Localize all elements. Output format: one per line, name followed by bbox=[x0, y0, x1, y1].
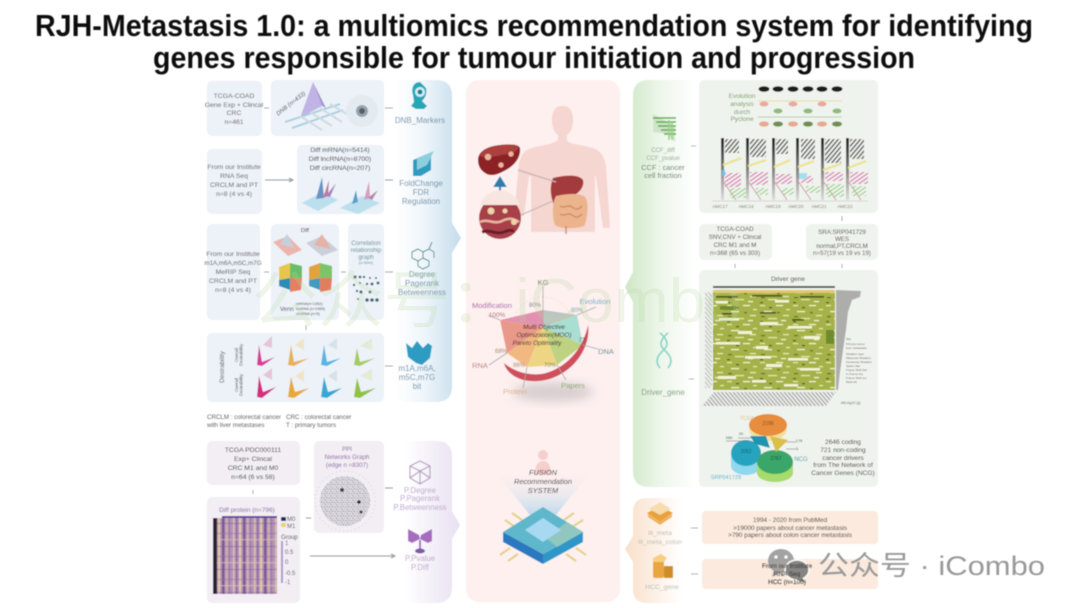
text: PPI network: Networks Graph bbox=[325, 454, 370, 461]
text: NCG note: cancer drivers bbox=[822, 455, 864, 462]
arrow bbox=[252, 490, 254, 494]
legend: oncoplot: In Frame Ins bbox=[846, 372, 863, 376]
watermark: center faint: 公众号：iCombo bbox=[252, 267, 742, 336]
text: TCGA-COAD SNV: n=368 (65 vs 303) bbox=[710, 250, 760, 257]
text: differential RNA counts: Diff mRNA(n=5414) bbox=[310, 147, 370, 154]
text: HCC gene: HCC_gene bbox=[645, 584, 679, 591]
icon: HCC gene bbox=[653, 554, 673, 578]
text: P metrics: P.Pagerank bbox=[400, 494, 440, 503]
text: fusion system bbox=[514, 468, 572, 495]
icon: literature box bbox=[647, 502, 673, 525]
legend: oncoplot: Mutation type bbox=[846, 352, 864, 356]
text: modification sites bbox=[398, 364, 436, 391]
arrow bbox=[264, 271, 393, 273]
text: correlation graph: Correlation bbox=[351, 241, 381, 247]
text: desirability axis labels: Desirability bbox=[238, 373, 244, 396]
card: evolution analysis bbox=[699, 80, 878, 213]
text: Venn labels: 280 bbox=[726, 435, 733, 440]
title bbox=[35, 8, 1033, 75]
arrow bbox=[264, 107, 393, 109]
text: AMC labels: AMC19 bbox=[738, 204, 754, 209]
text: NCG note: Cancer Genes (NCG) bbox=[811, 470, 875, 477]
text: abbreviation legend bbox=[206, 414, 351, 429]
text: abbreviation legend: CRCLM : colorectal cancer bbox=[207, 414, 281, 421]
card: diff protein heatmap bbox=[207, 497, 300, 603]
text: P metrics bbox=[393, 486, 447, 512]
chart: radar rings bbox=[513, 297, 573, 357]
legend: oncoplot: -Mb-log10 (q) bbox=[840, 401, 860, 405]
text: PPI network: PPI bbox=[342, 446, 352, 453]
text: literature: lit_meta bbox=[648, 530, 672, 537]
text: abbreviation legend: T : primary tumors bbox=[286, 422, 336, 429]
text: fold change: Regulation bbox=[402, 197, 440, 206]
text: correlation graph bbox=[351, 241, 382, 265]
text: AMC labels: AMC17 bbox=[712, 204, 728, 209]
text: TCGA PDC source: n=64 (6 vs 58) bbox=[231, 474, 275, 481]
legend: oncoplot: Frame Shift Del bbox=[846, 368, 867, 372]
chart: DNB surface: DNB (n=433) bbox=[276, 91, 307, 117]
text: PubMed: >19000 papers about cancer metastasis bbox=[733, 525, 847, 532]
chart: DNB radial bbox=[346, 95, 378, 127]
card: DNB plot bbox=[271, 80, 384, 136]
text: SRA: SRA:SRP041729 bbox=[818, 229, 866, 236]
arrow bbox=[691, 145, 696, 147]
text: MOO caption: Pareto Optimality bbox=[512, 340, 562, 347]
text: DNB markers: DNB_Markers bbox=[395, 116, 445, 125]
text: radar labels: 80% bbox=[529, 303, 542, 309]
text: Venn labels: 2767 bbox=[770, 456, 782, 462]
icon: purple tree bbox=[408, 529, 432, 554]
legend: oncoplot: Nonsense Mutation bbox=[846, 360, 872, 364]
card: RNA seq source bbox=[207, 149, 262, 214]
panel: fusion recommendation system bbox=[498, 450, 588, 564]
text: desirability axis labels: Overall bbox=[234, 378, 239, 392]
chart: RNA volcano left bbox=[302, 177, 338, 211]
panel: literature and HCC bbox=[638, 502, 878, 591]
text: RNA seq source: CRCLM and PT bbox=[210, 182, 258, 189]
legend: heatmap: -0.5 bbox=[285, 571, 296, 577]
icon: person and light cone bbox=[498, 450, 588, 515]
text: degree metrics bbox=[398, 270, 446, 297]
text: MeRIP source: From our Institute bbox=[206, 251, 260, 258]
text: desirability axis labels: Desirability bbox=[238, 343, 244, 366]
legend: heatmap: 0 bbox=[285, 560, 289, 566]
legend: oncoplot: Site bbox=[846, 337, 852, 341]
icon: DNB marker bbox=[411, 82, 427, 109]
text: CCF: CCF_pvalue bbox=[646, 156, 680, 162]
icon: DNA helix bbox=[657, 333, 671, 368]
chart: PPI network graph bbox=[315, 471, 375, 531]
card: PPI network bbox=[314, 441, 384, 533]
text: P value: P.Pvalue bbox=[405, 554, 435, 563]
text: P metrics: P.Betweenness bbox=[393, 503, 447, 512]
text: evolution analysis: analysis bbox=[730, 101, 754, 108]
text: radar labels: KG bbox=[538, 278, 549, 287]
text: evolution analysis: durch bbox=[734, 109, 751, 116]
text: fold change: FoldChange bbox=[399, 179, 443, 188]
text: PubMed: 1994 - 2020 from PubMed bbox=[753, 517, 828, 524]
arrow bbox=[689, 378, 694, 380]
text: HCC source: HCC (n=100) bbox=[768, 579, 806, 586]
chart: gene name column bbox=[705, 292, 712, 388]
text: NCG note: 721 non-coding bbox=[820, 447, 866, 454]
chart: desirability row 1 bbox=[257, 336, 375, 366]
text: NCG note bbox=[811, 439, 875, 477]
chart: radar wedges bbox=[500, 310, 583, 367]
text: radar labels: 80% bbox=[571, 308, 584, 314]
legend: heatmap: M0 bbox=[287, 517, 296, 523]
legend: heatmap: Group bbox=[281, 535, 298, 541]
legend: heatmap: M1 bbox=[287, 524, 296, 530]
icon: chip bbox=[503, 507, 583, 564]
text: CCF: CCF : cancer bbox=[641, 163, 685, 172]
text: SRA: WES bbox=[835, 236, 849, 243]
text: Venn labels bbox=[711, 416, 808, 481]
icon: intestines bbox=[553, 194, 587, 234]
text: TCGA-COAD SNV bbox=[709, 226, 761, 257]
panel: blue arrow summary band bbox=[395, 80, 461, 402]
text: radar labels: DNA bbox=[598, 347, 614, 356]
icon: liver in body bbox=[551, 176, 583, 206]
icon: CCF funnel bbox=[653, 114, 676, 142]
panel: TCGA-COAD DNB row bbox=[205, 80, 445, 136]
text: radar labels: 86% bbox=[513, 363, 526, 369]
panel: driver gene bbox=[641, 270, 878, 487]
text: fusion system: Recommendation bbox=[514, 477, 572, 486]
text: radar labels: Papers bbox=[561, 381, 585, 390]
panel: MeRIP seq row bbox=[204, 224, 446, 320]
chart: Venn drive sources bbox=[726, 414, 796, 482]
text: AMC labels: AMC22 bbox=[837, 204, 853, 209]
text: MeRIP source: MeRIP Seq bbox=[216, 269, 251, 276]
text: TCGA-COAD source: n=461 bbox=[224, 119, 244, 126]
arrow bbox=[385, 365, 393, 367]
panel: purple arrow summary band bbox=[405, 441, 460, 603]
text: driver gene: Driver gene bbox=[771, 276, 805, 283]
icon: colon with tumours bbox=[479, 190, 521, 239]
panel: central fusion panel bbox=[466, 80, 620, 602]
icon: human silhouette bbox=[514, 106, 610, 232]
chart: pyclone clones bbox=[758, 86, 842, 127]
arrow: liver connector bbox=[518, 170, 556, 215]
text: modification sites: m1A,m6A, bbox=[398, 364, 436, 373]
chart: sample labels bbox=[702, 392, 836, 406]
arrow bbox=[691, 528, 698, 574]
text: radar labels: RNA bbox=[472, 361, 488, 370]
legend: heatmap bbox=[281, 517, 298, 586]
card: PubMed bbox=[702, 511, 878, 544]
arrow bbox=[305, 325, 307, 330]
text: Venn labels: SRP041729 bbox=[711, 475, 741, 481]
icon: m6A site waves bbox=[406, 341, 432, 365]
chart: mutation frequency bars bbox=[836, 290, 861, 390]
text: HCC source: From our Institute bbox=[762, 563, 812, 570]
card: TCGA PDC source bbox=[207, 441, 300, 485]
text: correlation graph: graph bbox=[358, 255, 374, 261]
card: differential RNA bbox=[297, 145, 384, 214]
text: abbreviation legend: CRC : colorectal cancer bbox=[286, 414, 351, 421]
chart: RNA volcano right bbox=[340, 181, 380, 214]
arrow bbox=[306, 488, 395, 558]
arrow bbox=[735, 216, 842, 268]
text: fold change bbox=[399, 179, 443, 206]
text: SRA: normal,PT,CRCLM bbox=[816, 243, 868, 250]
text: TCGA PDC source: CRC M1 and M0 bbox=[228, 465, 279, 472]
text: Venn counts: lncRNA (n=1565) bbox=[296, 307, 326, 311]
text: MOO caption bbox=[512, 324, 572, 347]
text: fusion system: SYSTEM bbox=[528, 486, 559, 495]
text: RNA seq source: n=8 (4 vs 4) bbox=[216, 191, 252, 198]
legend: oncoplot: Multi Hit bbox=[846, 380, 857, 384]
text: TCGA-COAD source: CRC bbox=[227, 110, 241, 117]
card: MeRIP source bbox=[207, 224, 260, 320]
text: Venn counts: circRNA (n=5) bbox=[296, 312, 320, 316]
text: HCC source bbox=[762, 563, 812, 586]
text: TCGA-COAD source bbox=[205, 93, 264, 126]
text: TCGA-COAD source: Gene Exp + Clincal bbox=[205, 102, 264, 109]
text: RNA seq source: From our Institute bbox=[207, 164, 261, 171]
text: degree metrics: Degree bbox=[409, 270, 436, 279]
text: abbreviation legend: with liver metastases bbox=[206, 422, 264, 429]
text: CCF bbox=[641, 148, 685, 180]
text: radar labels: Evolution bbox=[580, 297, 610, 306]
card: correlation graph bbox=[348, 224, 384, 320]
text: TCGA-COAD SNV: TCGA-COAD bbox=[716, 226, 754, 233]
legend: oncoplot: Missense Mutation bbox=[846, 356, 871, 360]
text: Venn labels: TCGA bbox=[740, 416, 755, 422]
text: desirability axis labels bbox=[219, 343, 244, 396]
panel: body and metastasis illustration bbox=[478, 106, 610, 239]
card: desirability plots bbox=[207, 333, 384, 402]
text: TCGA-COAD SNV: SNV,CNV + Clincal bbox=[709, 234, 761, 241]
text: driver gene label: Driver_gene bbox=[641, 388, 685, 397]
text: diff protein: Diff protein (n=796) bbox=[219, 507, 275, 514]
text: NCG note: 2646 coding bbox=[825, 439, 861, 446]
text: modification sites: bit bbox=[413, 382, 422, 391]
text: Venn labels: 2198 bbox=[762, 421, 774, 427]
shadow: radar bbox=[513, 382, 593, 402]
chart: red crescent bbox=[504, 325, 588, 381]
text: evolution analysis: Pyclone bbox=[730, 116, 754, 123]
text: CCF: CCF_diff bbox=[651, 148, 675, 154]
text: TCGA PDC source bbox=[225, 447, 281, 481]
card: driver gene bbox=[699, 270, 878, 487]
text: SRA: n=57(19 vs 19 vs 19) bbox=[813, 250, 871, 257]
panel: proteomics bbox=[207, 441, 447, 603]
text: radar labels: Modification bbox=[472, 301, 512, 310]
text: differential RNA counts bbox=[309, 147, 371, 172]
text: desirability axis labels: Overall bbox=[234, 348, 239, 362]
text: desirability axis labels: Desirability bbox=[219, 350, 226, 383]
text: Diff: Diff bbox=[301, 228, 310, 234]
text: P value: P.Diff bbox=[411, 563, 430, 572]
text: CCF: cell fraction bbox=[644, 171, 682, 180]
text: RNA seq source bbox=[207, 164, 261, 198]
text: AMC labels: AMC19 bbox=[765, 204, 781, 209]
text: radar labels: 70% bbox=[544, 363, 557, 369]
legend: heatmap: 0.5 bbox=[285, 550, 294, 556]
icon: purple cube bbox=[410, 461, 430, 484]
text: radar labels: 7? bbox=[579, 338, 586, 344]
watermark: iCombo: 公众号 · iCombo bbox=[818, 551, 1045, 581]
text: PPI network bbox=[325, 446, 370, 469]
text: Venn labels: 2052 bbox=[740, 449, 752, 455]
text: fusion system: FUSION bbox=[529, 468, 558, 477]
chart: DNB surface bbox=[276, 82, 350, 130]
legend: oncoplot bbox=[840, 337, 872, 405]
legend: oncoplot: Primary tumor bbox=[846, 342, 865, 346]
panel: RNA seq row bbox=[207, 145, 443, 214]
text: literature bbox=[638, 530, 682, 546]
chart: protein heatmap bbox=[213, 516, 277, 594]
arrow bbox=[265, 178, 393, 182]
text: Venn labels: 176 bbox=[796, 438, 803, 443]
legend: oncoplot: liver metastasis bbox=[846, 346, 867, 350]
text: P value bbox=[405, 554, 435, 572]
panel: multi objective radar bbox=[472, 278, 614, 402]
text: TCGA PDC source: TCGA PDC000111 bbox=[225, 447, 281, 454]
text: MOO caption: Optimization(MOO) bbox=[516, 332, 572, 339]
panel: TCGA and SRA sources bbox=[699, 216, 878, 268]
text: MeRIP source bbox=[204, 251, 262, 294]
legend: heatmap: 1 bbox=[285, 541, 289, 547]
chart: diff 3D pair bbox=[273, 234, 338, 256]
text: Venn counts bbox=[280, 302, 326, 316]
text: differential RNA counts: Diff circRNA(n=207) bbox=[310, 165, 370, 172]
text: AMC labels bbox=[712, 204, 853, 209]
text: radar labels: 68% bbox=[495, 349, 508, 355]
text: HCC source: RNA Seq bbox=[774, 571, 801, 578]
legend: oncoplot: Frame Shift Ins bbox=[846, 376, 867, 380]
icon: molecular graph bbox=[412, 242, 434, 269]
title: genes responsible for tumour initiation and progression bbox=[153, 40, 915, 75]
icon: chip pins bbox=[500, 513, 586, 561]
card: HCC bbox=[702, 559, 878, 589]
text: Venn counts: Venn bbox=[280, 307, 294, 313]
text: Venn labels: 3 bbox=[796, 446, 799, 451]
text: radar labels: 100% bbox=[489, 312, 506, 319]
text: TCGA-COAD SNV: CRC M1 and M bbox=[714, 242, 756, 249]
chart: driver gene oncoplot bbox=[713, 286, 835, 390]
text: TCGA PDC source: Exp+ Clincal bbox=[234, 456, 272, 463]
panel: desirability row bbox=[207, 325, 436, 402]
text: radar labels bbox=[472, 278, 614, 396]
text: AMC labels: AMC20 bbox=[788, 204, 804, 209]
icon: liver with tumours bbox=[478, 144, 520, 175]
panel: evolution analysis bbox=[641, 80, 878, 213]
text: PubMed: >790 papers about colon cancer metastasis bbox=[728, 532, 852, 539]
chart: radar spokes bbox=[488, 286, 598, 388]
text: SRA bbox=[813, 229, 871, 257]
chart: AMC clonal columns bbox=[712, 138, 868, 201]
text: RNA seq source: RNA Seq bbox=[220, 173, 248, 180]
panel: orange arrow summary band bbox=[625, 498, 682, 603]
text: differential RNA counts: Diff lncRNA(n=8700) bbox=[309, 156, 371, 163]
text: MeRIP source: CRCLM and PT bbox=[209, 278, 257, 285]
text: MeRIP source: m1A,m6A,m5C,m7G bbox=[204, 260, 262, 267]
text: radar labels: Protein bbox=[503, 387, 527, 396]
chart: desirability row 2 bbox=[257, 368, 376, 398]
text: modification sites: m5C,m7G bbox=[399, 373, 435, 382]
text: evolution analysis bbox=[729, 93, 756, 123]
text: Venn labels: NCG bbox=[794, 457, 808, 463]
card: SRA bbox=[806, 224, 878, 260]
text: P metrics: P.Degree bbox=[404, 486, 436, 495]
card: differential and Venn bbox=[271, 224, 339, 320]
text: degree metrics: Betweenness bbox=[398, 288, 446, 297]
text: literature: lit_meta_colon bbox=[638, 539, 682, 546]
chart: node clusters bbox=[353, 275, 380, 302]
card: TCGA-COAD bbox=[207, 81, 262, 136]
arrow: metastasis up bbox=[495, 178, 505, 198]
legend: oncoplot: Splice Site bbox=[846, 364, 861, 368]
text: TCGA-COAD source: TCGA-COAD bbox=[214, 93, 254, 100]
text: MOO caption: Multi Objective bbox=[523, 324, 565, 331]
text: evolution analysis: Evolution bbox=[729, 93, 756, 100]
text: fold change: FDR bbox=[413, 188, 429, 197]
icon: WeChat bubbles bbox=[768, 549, 809, 583]
icon: fold change bbox=[413, 151, 434, 176]
text: AMC labels: AMC21 bbox=[811, 204, 827, 209]
text: correlation graph: (n=5044) bbox=[359, 261, 373, 265]
text: degree metrics: Pagerank bbox=[405, 279, 440, 288]
text: PubMed bbox=[728, 517, 852, 539]
text: PPI network: (edge n =8307) bbox=[326, 462, 368, 469]
legend: heatmap: -1 bbox=[285, 580, 291, 586]
text: NCG note: from The Network of bbox=[813, 462, 873, 469]
panel: green arrow summary band bbox=[625, 80, 695, 487]
card: TCGA-COAD SNV bbox=[699, 224, 772, 260]
text: Venn counts: mRNA(n=1352) bbox=[296, 302, 323, 306]
text: Venn labels: 20 bbox=[739, 431, 744, 436]
chart: Venn mosaic pair bbox=[279, 263, 332, 292]
text: MeRIP source: n=8 (4 vs 4) bbox=[215, 287, 251, 294]
text: correlation graph: relationship bbox=[351, 248, 382, 254]
